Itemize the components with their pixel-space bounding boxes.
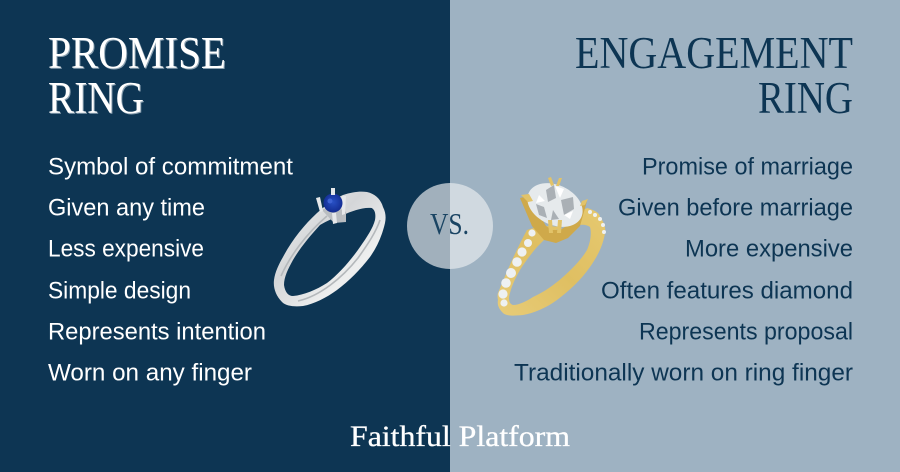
list: engagement ring traits: Traditionally worn on ring finger [514,360,853,386]
heading: engagement ring: RING [758,73,853,123]
list: promise ring traits: Worn on any finger [48,360,252,386]
list: promise ring traits: Represents intention [48,318,266,346]
heading: promise ring: PROMISE [49,29,227,79]
heading: promise ring: PROMISE [48,28,226,78]
badge: vs circle: VS. [430,206,469,241]
list: promise ring traits: Symbol of commitment [48,154,293,180]
list: engagement ring traits: Often features diamond [601,278,853,304]
heading: promise ring [48,28,227,124]
list: engagement ring traits: More expensive [685,236,853,262]
icon: gold engagement ring with diamond [498,175,606,316]
panel: promise ring background [0,0,450,472]
list: engagement ring traits: Represents proposal [639,318,853,346]
list: engagement ring traits: Given before marriage [618,194,853,222]
panel: engagement ring background [450,0,900,472]
badge: vs circle [407,183,493,269]
heading: promise ring: RING [49,74,145,124]
heading: promise ring: RING [48,73,144,123]
list: promise ring traits: Less expensive [48,236,204,262]
logo: Faithful Platform: Faithful Platform [350,420,570,453]
heading: engagement ring [575,28,853,123]
list: engagement ring traits [514,154,853,386]
list: engagement ring traits: Promise of marriage [642,154,853,180]
list: promise ring traits: Given any time [48,194,205,222]
list: promise ring traits [48,154,293,386]
list: promise ring traits: Simple design [48,278,191,304]
heading: engagement ring: ENGAGEMENT [575,28,853,78]
icon: silver promise ring with sapphire [274,188,386,306]
